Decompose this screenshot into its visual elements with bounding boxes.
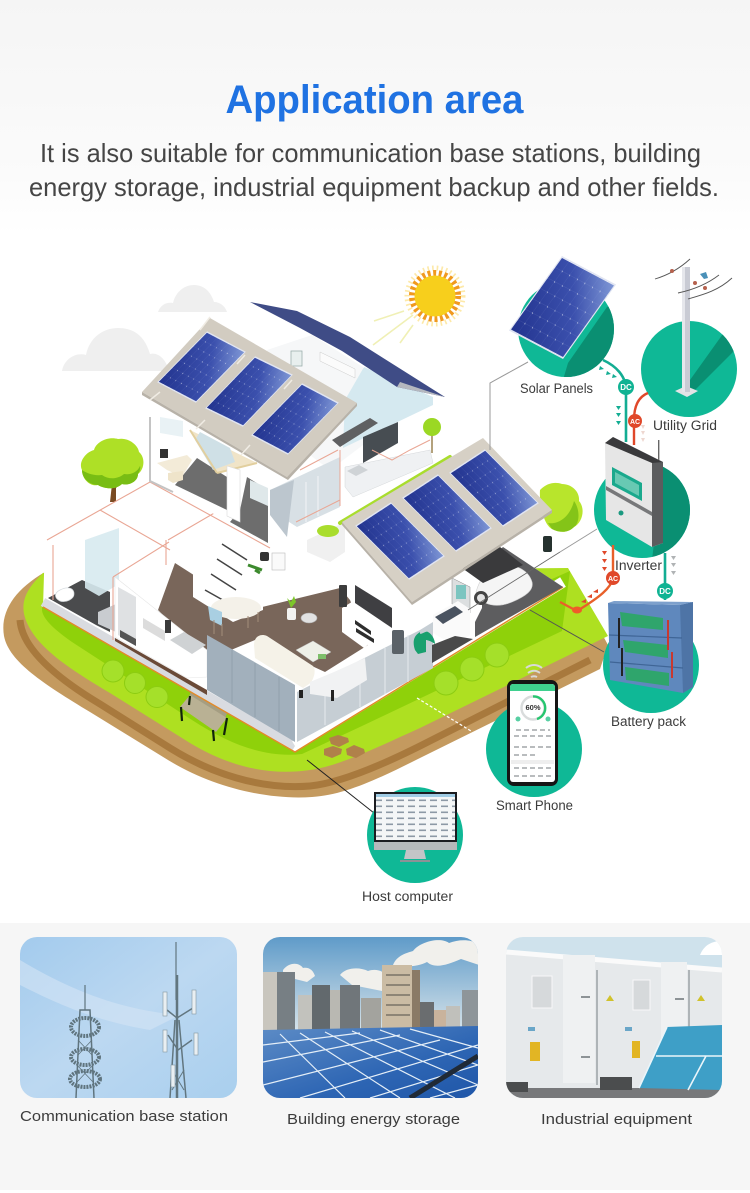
utility wall devices xyxy=(310,658,367,698)
white counter xyxy=(345,450,433,497)
dining and living floor xyxy=(158,563,368,672)
glass wall dark xyxy=(207,635,295,742)
ac flow: grid to inverter: AC xyxy=(630,419,640,426)
containers xyxy=(506,950,722,1092)
dashed path xyxy=(417,698,471,731)
phone: 60% xyxy=(525,703,541,712)
label: industrial equipment: Industrial equipment xyxy=(541,1111,693,1128)
callout: smart phone xyxy=(486,665,582,813)
pillar xyxy=(227,466,240,522)
callout: smart phone: Smart Phone xyxy=(496,798,573,813)
card: communication base station xyxy=(20,937,237,1098)
solar field xyxy=(263,1026,478,1098)
monitor xyxy=(374,792,457,862)
label: building energy storage: Building energy storage xyxy=(287,1111,460,1128)
solar panel 2 xyxy=(206,357,292,426)
card: industrial equipment xyxy=(506,937,722,1098)
left tower xyxy=(70,985,100,1098)
solar panels xyxy=(639,1025,722,1090)
grey floor right xyxy=(230,477,268,543)
desk xyxy=(157,455,192,477)
skyline xyxy=(263,965,478,1033)
ac indoor xyxy=(160,417,183,437)
shelves and stairs xyxy=(193,540,263,622)
callout: utility grid: Utility Grid xyxy=(653,418,717,433)
callout: battery pack xyxy=(603,601,699,729)
callout: battery pack: Battery pack xyxy=(611,714,686,729)
solar panel 5 xyxy=(403,475,491,551)
upper slab xyxy=(150,390,360,545)
title: Application area xyxy=(226,78,524,122)
plant pot xyxy=(287,596,296,620)
sun xyxy=(373,268,463,345)
tree right xyxy=(540,483,583,532)
solar panel 1 xyxy=(158,332,245,402)
bathroom floor xyxy=(48,580,110,632)
dining table xyxy=(208,597,261,636)
inverter device xyxy=(605,437,663,547)
glass wall light xyxy=(297,622,433,742)
bushes xyxy=(102,643,509,708)
bench xyxy=(180,691,227,741)
bed xyxy=(190,430,257,473)
kitchen block xyxy=(115,577,207,678)
subtitle: energy storage, industrial equipment backup and other fields. xyxy=(29,172,719,202)
back roof solar strip xyxy=(250,302,445,397)
planter hedge xyxy=(307,457,450,562)
glass wall upper right xyxy=(343,367,433,448)
subtitle: It is also suitable for communication base stations, building xyxy=(40,138,701,168)
callout leader lines xyxy=(307,362,604,813)
subtitle xyxy=(29,138,719,202)
car bay xyxy=(432,536,563,663)
callout: inverter: Inverter xyxy=(615,558,663,573)
label: communication base station: Communication base station xyxy=(20,1108,228,1125)
phone xyxy=(507,680,558,786)
card: building energy storage xyxy=(263,937,479,1098)
ac flow: inverter to house: AC xyxy=(608,576,618,583)
base slab xyxy=(43,482,563,752)
callout: host computer: Host computer xyxy=(362,889,454,904)
house ground floor xyxy=(43,482,563,752)
tv unit xyxy=(339,585,392,648)
solar panel 4 xyxy=(356,503,444,579)
callout: solar panels: Solar Panels xyxy=(520,381,593,396)
clouds xyxy=(283,940,479,991)
floor upper right xyxy=(332,418,378,447)
back wall xyxy=(267,335,363,470)
front glass xyxy=(270,457,340,527)
wiring xyxy=(47,482,270,640)
sofa xyxy=(254,635,315,688)
upper floor rooms xyxy=(150,335,433,545)
callout: solar panels xyxy=(509,256,616,393)
ac flow: inverter to house xyxy=(560,545,620,614)
wifi icon xyxy=(526,665,542,677)
upper roof xyxy=(142,317,357,480)
utility pole xyxy=(655,259,732,397)
battery stack xyxy=(608,601,693,693)
stepping stones xyxy=(324,735,365,758)
ac flow: grid to inverter xyxy=(628,393,648,445)
small tree xyxy=(423,418,441,453)
dc flow: solar to inverter: DC xyxy=(620,383,632,392)
dc flow: inverter to battery: DC xyxy=(659,587,671,596)
tv upper xyxy=(363,422,398,463)
grey floor left xyxy=(175,458,227,510)
ground xyxy=(506,1088,722,1098)
lower roof xyxy=(342,438,552,605)
dc flow: solar to inverter xyxy=(599,360,634,442)
callout: host computer xyxy=(362,787,463,904)
callout: inverter xyxy=(594,437,690,570)
callout: utility grid xyxy=(641,259,740,433)
ground island xyxy=(3,563,608,797)
tree left xyxy=(81,438,143,502)
solar panel 6 xyxy=(450,450,538,526)
car xyxy=(462,547,532,605)
dc flow: inverter to battery xyxy=(657,553,676,600)
solar panel 3 xyxy=(252,384,338,454)
clouds xyxy=(62,285,227,371)
right tower xyxy=(167,942,193,1098)
